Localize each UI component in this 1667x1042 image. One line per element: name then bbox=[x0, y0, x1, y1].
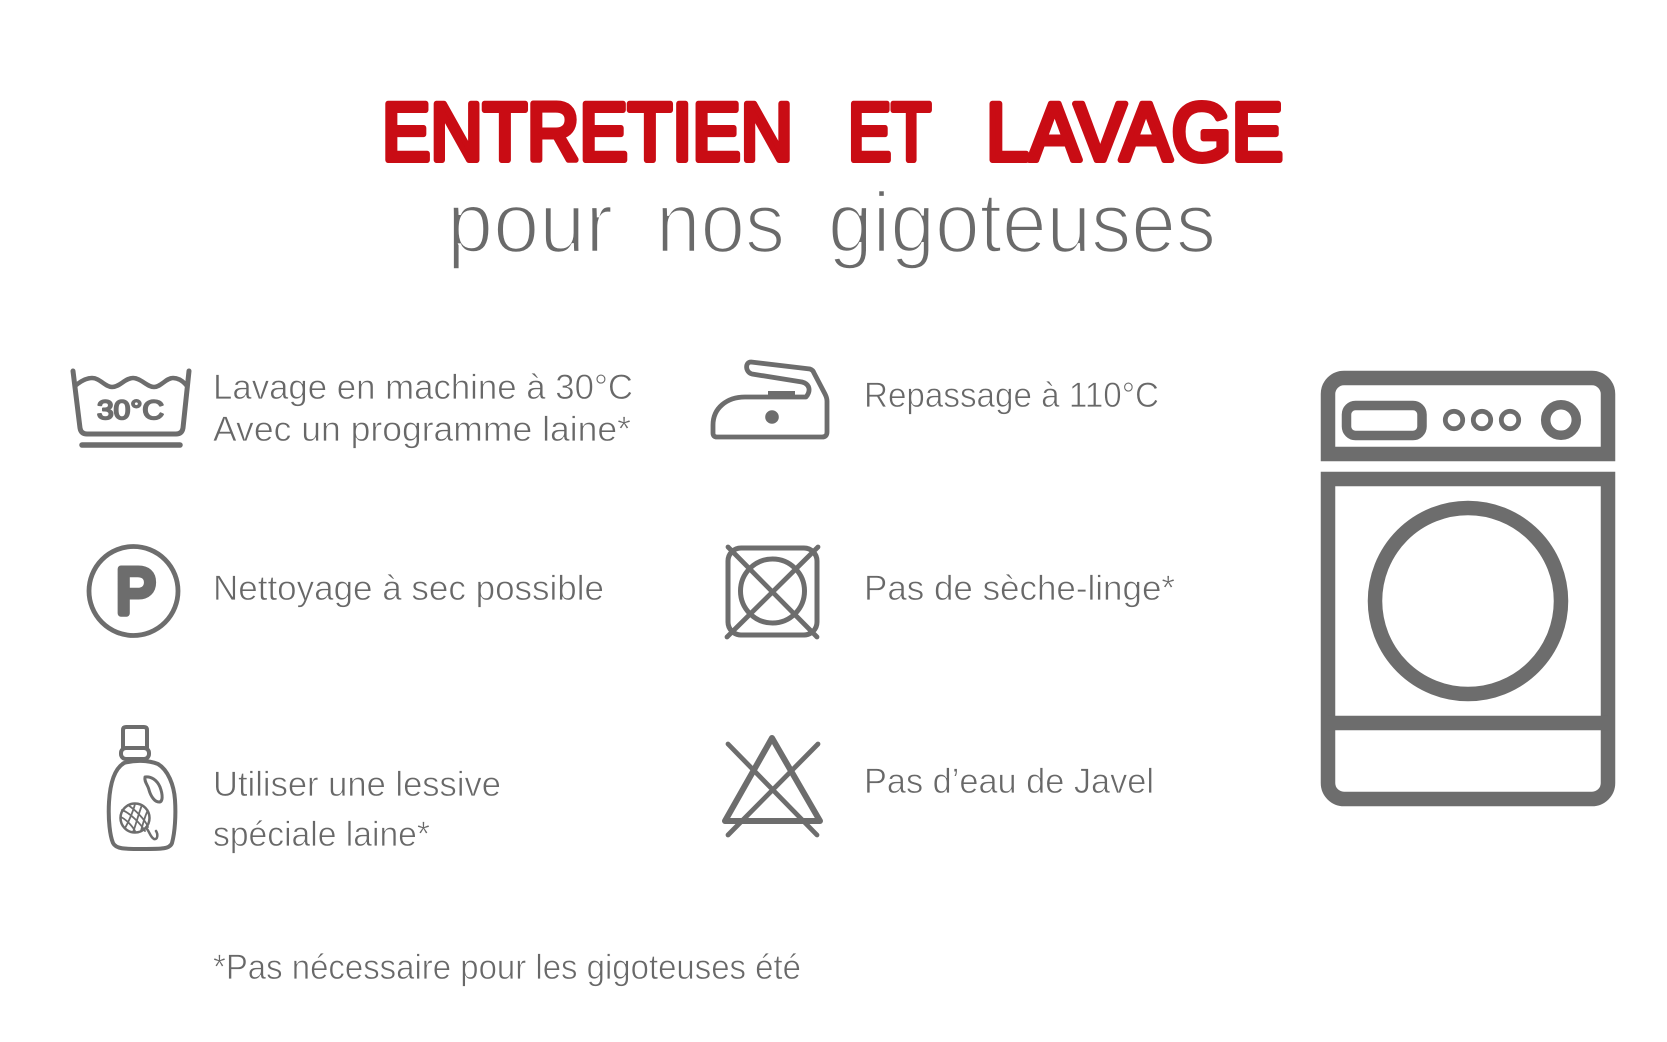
text: no bleach: Pas d’eau de Javel bbox=[864, 762, 1154, 801]
subtitle: pour nos gigoteuses: nos bbox=[656, 176, 785, 271]
footnote: *Pas nécessaire pour les gigoteuses été bbox=[213, 948, 801, 987]
text: dry clean: Nettoyage à sec possible bbox=[213, 569, 604, 608]
icon: wash tub 30 degrees: 30°C bbox=[97, 395, 164, 425]
washer knob bbox=[1546, 405, 1576, 435]
title: entretien et lavage: LAVAGE bbox=[986, 87, 1283, 178]
text: wool programme: Avec un programme laine* bbox=[213, 410, 631, 449]
icon: no tumble dryer bbox=[727, 547, 818, 637]
title: entretien et lavage: ET bbox=[848, 87, 931, 178]
text: use wool detergent: Utiliser une lessive bbox=[213, 765, 501, 804]
icon: dry clean P bbox=[89, 546, 178, 636]
washer lower divider bbox=[1328, 716, 1608, 730]
text: no dryer: Pas de sèche-linge* bbox=[864, 569, 1175, 608]
subtitle: pour nos gigoteuses: gigoteuses bbox=[828, 176, 1216, 271]
washer drum door bbox=[1375, 508, 1561, 694]
icon: dry clean P: P bbox=[116, 555, 156, 627]
text: special wool: spéciale laine* bbox=[213, 815, 430, 854]
text: ironing: Repassage à 110°C bbox=[864, 376, 1159, 415]
icon: no bleach bbox=[725, 738, 820, 835]
title: entretien et lavage: ENTRETIEN bbox=[382, 87, 793, 178]
subtitle: pour nos gigoteuses bbox=[447, 176, 1216, 271]
text: machine wash: Lavage en machine à 30°C bbox=[213, 368, 633, 407]
washer body bbox=[1328, 479, 1608, 799]
icon: washing machine bbox=[1328, 378, 1608, 799]
icon: iron 110 degrees bbox=[713, 362, 827, 437]
icon: wash tub 30 degrees bbox=[73, 371, 189, 445]
washer small buttons bbox=[1445, 411, 1519, 429]
subtitle: pour nos gigoteuses: pour bbox=[447, 176, 613, 271]
washer display bbox=[1346, 406, 1422, 436]
title: entretien et lavage bbox=[382, 87, 1283, 178]
washer control panel bbox=[1328, 378, 1608, 454]
icon: detergent bottle with wool ball bbox=[109, 727, 175, 849]
